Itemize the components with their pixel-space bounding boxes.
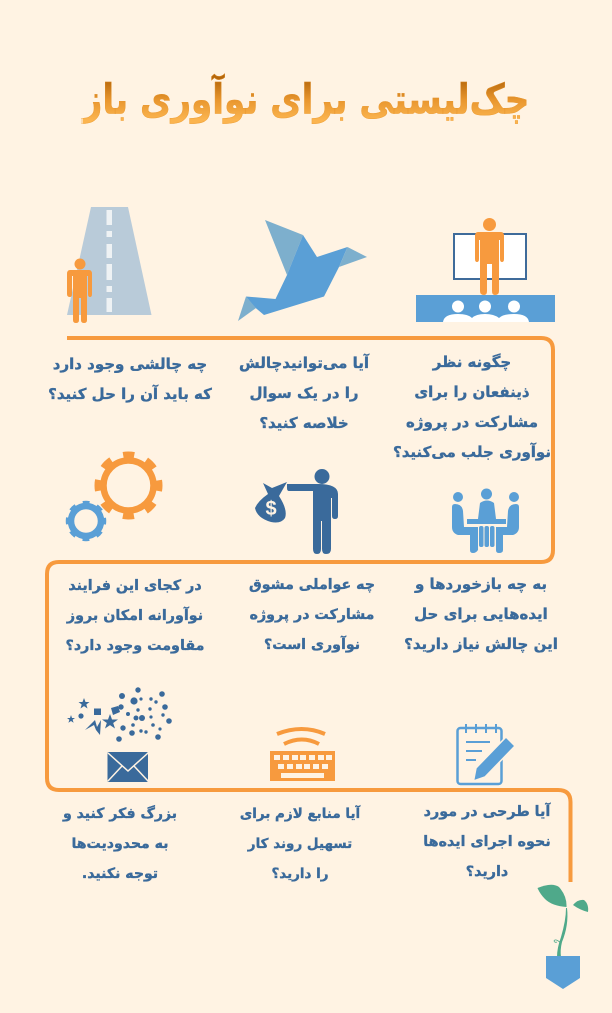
text: audience question <box>393 353 551 461</box>
text: resources question <box>240 804 361 882</box>
text: feedback question: ایده‌هایی برای حل <box>414 605 548 623</box>
text: think big: به محدودیت‌ها <box>71 836 169 852</box>
text: audience question: چگونه نظر <box>433 353 511 371</box>
text: think big: بزرگ فکر کنید و <box>63 806 177 822</box>
text: resources question: را دارید؟ <box>271 866 329 882</box>
icon: person holding money bag <box>255 469 338 554</box>
text: think big <box>62 804 177 882</box>
text: resistance question <box>66 578 204 654</box>
text: summarize challenge question <box>239 353 370 432</box>
text: feedback question: این چالش نیاز دارید؟ <box>404 635 558 653</box>
text: feedback question: به چه بازخوردها و <box>415 575 547 593</box>
title: چک‌لیستی برای نوآوری باز <box>83 75 529 124</box>
text: feedback question <box>404 575 558 653</box>
text: plan question <box>423 802 551 880</box>
icon: person holding money bag: $ <box>265 498 277 520</box>
text: motivation question: نوآوری است؟ <box>264 637 360 653</box>
text: motivation question: مشارکت در پروژه <box>250 607 374 623</box>
text: plan question: نحوه اجرای ایده‌ها <box>423 834 551 850</box>
text: resistance question: مقاومت وجود دارد؟ <box>66 638 204 654</box>
icon: origami bird <box>238 220 367 321</box>
text: think big: توجه نکنید. <box>82 866 158 882</box>
text: audience question: مشارکت در پروژه <box>406 413 538 431</box>
icon: meeting <box>452 488 519 553</box>
text: plan question: آیا طرحی در مورد <box>424 804 550 820</box>
icon: notepad and pencil <box>458 724 515 784</box>
icon: wireless keyboard <box>270 729 335 781</box>
icon: sprout in pot <box>538 885 588 989</box>
text: motivation question: چه عواملی مشوق <box>249 577 375 593</box>
orange connector path <box>47 338 570 882</box>
text: audience question: ذینفعان را برای <box>414 383 530 401</box>
text: resources question: آیا منابع لازم برای <box>240 806 360 822</box>
text: summarize challenge question: خلاصه کنید؟ <box>259 414 349 432</box>
text: resistance question: در کجای این فرایند <box>68 578 202 594</box>
text: resources question: تسهیل روند کار <box>248 836 352 852</box>
text: motivation question <box>249 577 375 653</box>
text: challenge question <box>48 355 212 403</box>
text: plan question: دارید؟ <box>466 864 508 880</box>
icon: envelope <box>108 752 148 782</box>
icon: presenter and audience <box>416 218 555 322</box>
text: challenge question: چه چالشی وجود دارد <box>53 355 207 373</box>
icon: road with person <box>67 207 152 323</box>
text: audience question: نوآوری جلب می‌کنید؟ <box>393 443 551 461</box>
icon: gears <box>68 455 159 539</box>
icon: scattered ideas <box>67 687 172 742</box>
text: challenge question: که باید آن را حل کنید؟ <box>48 385 212 403</box>
text: summarize challenge question: آیا می‌توانیدچالش <box>239 354 369 372</box>
text: resistance question: نوآورانه امکان بروز <box>67 608 203 624</box>
text: summarize challenge question: را در یک سوال <box>249 384 359 402</box>
